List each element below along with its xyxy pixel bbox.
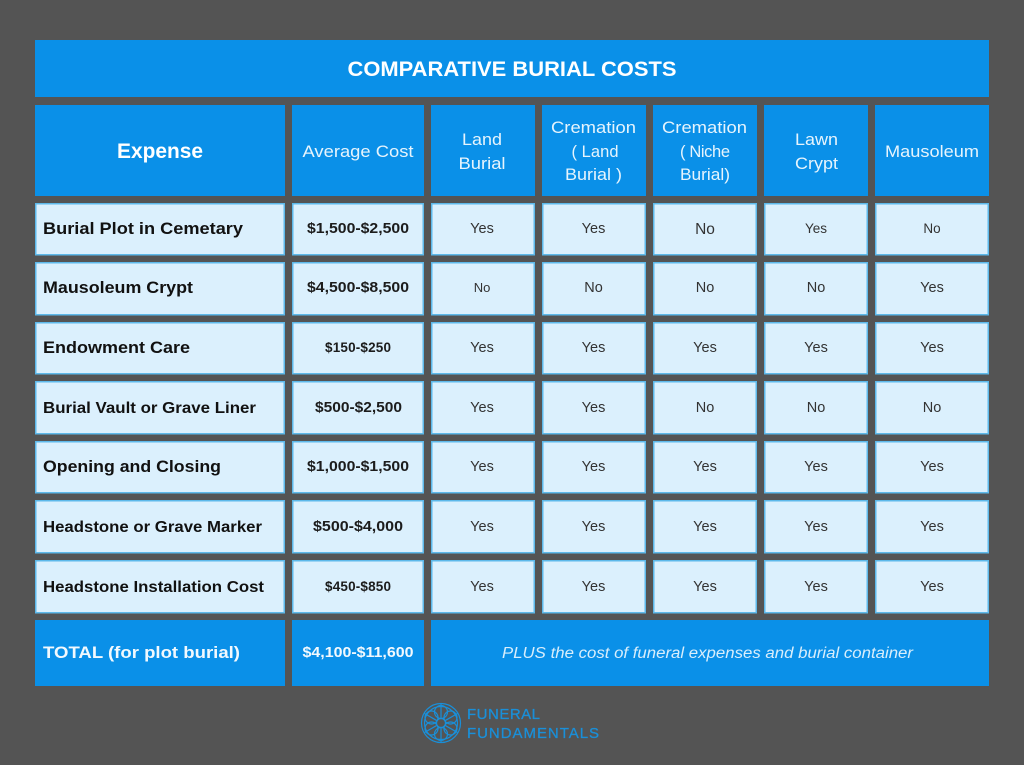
row: Headstone or Grave Marker: Yes — [920, 519, 944, 535]
row: Burial Plot in Cemetary: Yes — [470, 221, 494, 237]
row: Headstone Installation Cost — [36, 561, 988, 613]
icon: rosette — [422, 704, 460, 742]
table header row: Cremation — [551, 119, 636, 137]
table header row: Crypt — [795, 155, 838, 173]
row: Endowment Care: $150-$250 — [325, 340, 391, 355]
total row: TOTAL (for plot burial) — [43, 643, 240, 662]
row: Mausoleum Crypt: $4,500-$8,500 — [307, 280, 409, 296]
row: Burial Vault or Grave Liner: Burial Vault or Grave Liner — [43, 400, 256, 417]
total row — [35, 620, 989, 686]
row: Headstone or Grave Marker: Yes — [470, 519, 494, 535]
total row: $4,100-$11,600 — [302, 645, 414, 661]
row: Endowment Care: Yes — [582, 340, 605, 356]
title banner — [35, 40, 989, 97]
row: Endowment Care: Yes — [920, 340, 944, 356]
table header row: Burial — [458, 155, 506, 173]
row: Headstone Installation Cost: Headstone Installation Cost — [43, 579, 265, 596]
row: Mausoleum Crypt: No — [584, 280, 603, 296]
table header row: Lawn — [795, 131, 838, 149]
footer logo: FUNDAMENTALS — [467, 725, 599, 742]
row: Headstone Installation Cost: Yes — [920, 579, 944, 595]
row: Burial Vault or Grave Liner: $500-$2,500 — [315, 400, 402, 416]
row: Burial Vault or Grave Liner: No — [807, 400, 825, 416]
row: Burial Vault or Grave Liner — [36, 382, 988, 434]
row: Headstone or Grave Marker: Yes — [804, 519, 828, 535]
row: Opening and Closing: $1,000-$1,500 — [307, 459, 409, 475]
row: Headstone Installation Cost: Yes — [470, 579, 494, 595]
table header row: Mausoleum — [885, 143, 979, 161]
row: Burial Vault or Grave Liner: No — [923, 400, 941, 416]
footer logo — [422, 704, 599, 742]
title banner: COMPARATIVE BURIAL COSTS — [348, 57, 676, 81]
row: Endowment Care: Yes — [693, 340, 717, 356]
row: Burial Plot in Cemetary — [36, 204, 988, 255]
table header row: Expense — [117, 140, 203, 163]
row: Headstone or Grave Marker — [36, 501, 988, 553]
footer logo: FUNERAL — [467, 706, 540, 723]
row: Burial Vault or Grave Liner: Yes — [470, 400, 494, 416]
row: Endowment Care: Endowment Care — [43, 338, 190, 357]
row: Headstone Installation Cost: Yes — [582, 579, 605, 595]
table header row — [35, 105, 989, 196]
row: Burial Plot in Cemetary: Yes — [805, 221, 827, 236]
row: Burial Plot in Cemetary: No — [695, 221, 715, 238]
row: Mausoleum Crypt: No — [696, 280, 714, 296]
row: Headstone Installation Cost: $450-$850 — [325, 579, 391, 594]
row: Burial Plot in Cemetary: Burial Plot in Cemetary — [43, 219, 244, 238]
row: Mausoleum Crypt: No — [807, 280, 825, 296]
row: Burial Plot in Cemetary: Yes — [582, 221, 605, 237]
row: Opening and Closing — [36, 442, 988, 493]
table header row: Burial ) — [565, 166, 622, 184]
row: Headstone Installation Cost: Yes — [804, 579, 828, 595]
table header row: Burial) — [680, 166, 730, 184]
row: Endowment Care — [36, 323, 988, 374]
row: Headstone or Grave Marker: Yes — [693, 519, 717, 535]
row: Burial Plot in Cemetary: $1,500-$2,500 — [307, 221, 409, 237]
table header row: ( Land — [572, 143, 618, 161]
row: Mausoleum Crypt — [36, 263, 988, 315]
row: Burial Vault or Grave Liner: Yes — [582, 400, 605, 416]
table header row: Land — [462, 131, 502, 149]
row: Opening and Closing: Opening and Closing — [43, 457, 221, 476]
row: Headstone Installation Cost: Yes — [693, 579, 717, 595]
row: Headstone or Grave Marker: $500-$4,000 — [313, 519, 403, 535]
row: Burial Plot in Cemetary: No — [923, 221, 941, 236]
row: Headstone or Grave Marker: Yes — [582, 519, 605, 535]
row: Endowment Care: Yes — [470, 340, 494, 356]
row: Headstone or Grave Marker: Headstone or Grave Marker — [43, 519, 262, 536]
row: Opening and Closing: Yes — [693, 459, 717, 475]
row: Opening and Closing: Yes — [582, 459, 605, 475]
row: Mausoleum Crypt: Mausoleum Crypt — [43, 278, 193, 297]
table header row: ( Niche — [680, 143, 730, 161]
table header row: Average Cost — [302, 143, 414, 161]
row: Opening and Closing: Yes — [804, 459, 828, 475]
row: Mausoleum Crypt: Yes — [920, 280, 944, 296]
total row: PLUS the cost of funeral expenses and burial container — [502, 645, 914, 662]
row: Opening and Closing: Yes — [920, 459, 944, 475]
row: Mausoleum Crypt: No — [474, 280, 490, 295]
table header row: Cremation — [662, 119, 747, 137]
row: Opening and Closing: Yes — [470, 459, 494, 475]
row: Endowment Care: Yes — [804, 340, 828, 356]
row: Burial Vault or Grave Liner: No — [696, 400, 714, 416]
